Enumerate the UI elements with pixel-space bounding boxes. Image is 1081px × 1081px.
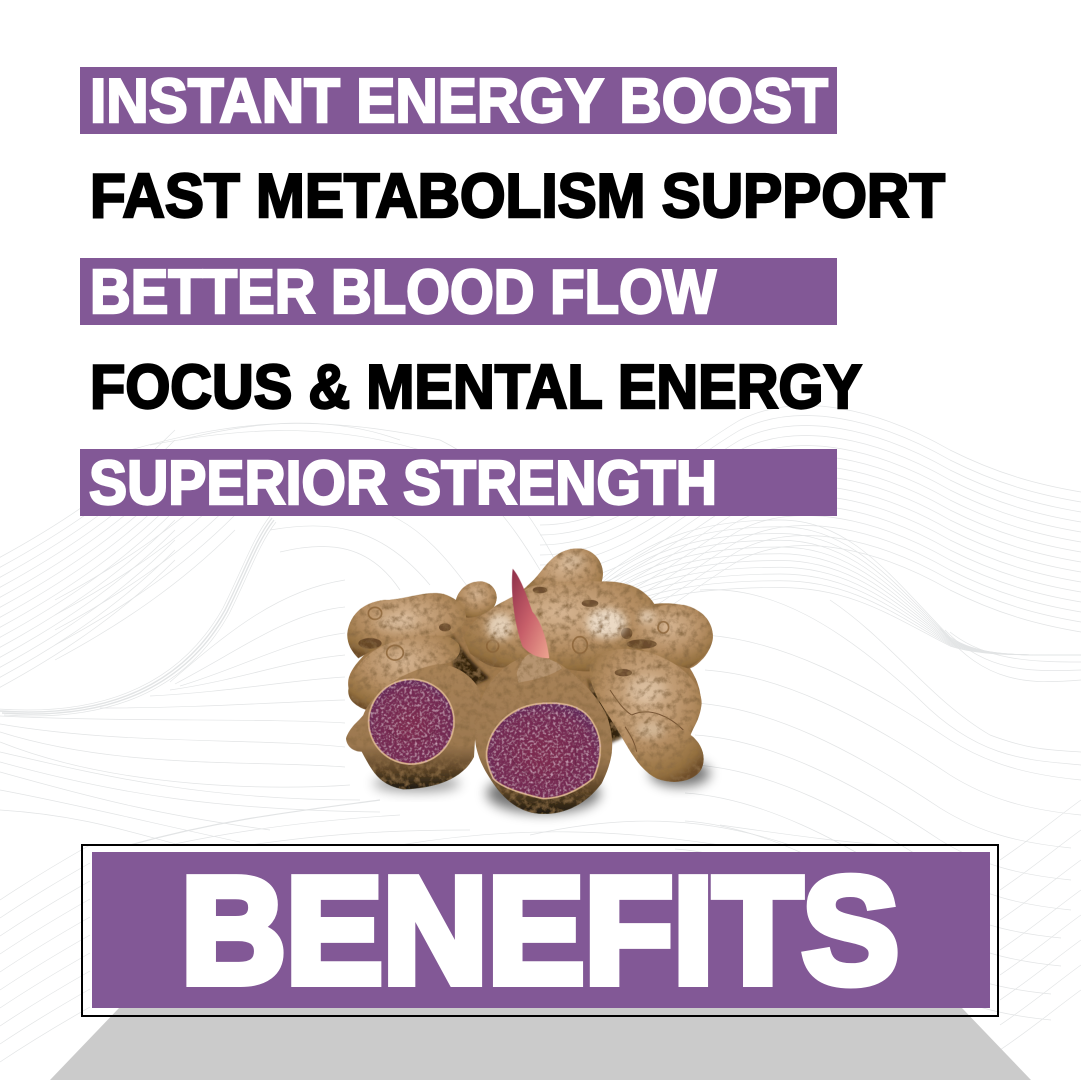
benefit 3: better blood flow: BETTER BLOOD FLOW xyxy=(90,258,716,327)
root: front left bulb xyxy=(346,664,481,789)
root: top knob xyxy=(527,548,602,602)
root: lower limb xyxy=(590,649,704,782)
root: crack lines xyxy=(610,690,683,752)
root: crown of center bulb xyxy=(517,654,562,683)
root: pink sprout xyxy=(512,569,549,658)
benefit 4: focus and mental energy: FOCUS & MENTAL ENERGY xyxy=(90,353,862,422)
root: front center bulb xyxy=(475,658,612,814)
root: central body xyxy=(463,581,657,671)
left cut: purple flesh xyxy=(369,679,454,764)
cut rings xyxy=(388,727,576,780)
root: eye marks xyxy=(358,587,657,676)
banner: grey trapezoid base xyxy=(50,1008,1031,1080)
root: upper left lobe xyxy=(347,594,466,658)
root: dark crevices xyxy=(452,633,623,743)
root: highlights xyxy=(377,553,667,738)
root: right lobe xyxy=(623,604,713,668)
root: lower left lobe xyxy=(348,636,460,710)
benefit 2: fast metabolism support: FAST METABOLISM SUPPORT xyxy=(90,162,945,231)
benefit 1: instant energy boost: INSTANT ENERGY BOOST xyxy=(90,67,828,136)
root: joined silhouette base xyxy=(348,548,713,782)
center cut: purple flesh xyxy=(487,703,600,799)
banner: benefits title: BENEFITS xyxy=(181,846,899,1014)
root: small knob xyxy=(456,581,497,618)
illustration: purple ginger root xyxy=(346,548,713,814)
benefit 5: superior strength: SUPERIOR STRENGTH xyxy=(89,449,717,518)
